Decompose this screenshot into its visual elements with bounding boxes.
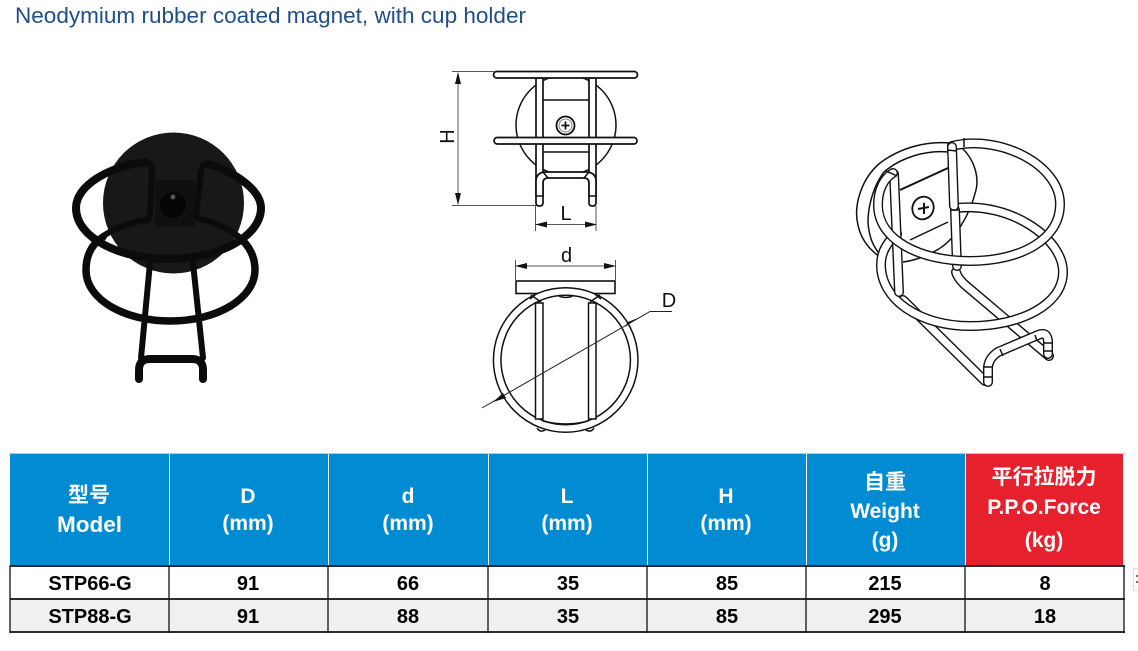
table header: Weight — [850, 500, 920, 523]
table header: (mm) — [222, 512, 274, 535]
table header: D — [240, 485, 256, 508]
specification table — [9, 454, 1125, 633]
row: STP66-G: STP66-G — [48, 573, 132, 595]
lower ring — [881, 207, 1063, 326]
table header: L — [561, 485, 574, 508]
row: STP88-G: 85 — [716, 606, 738, 628]
table header: P.P.O.Force — [987, 496, 1101, 519]
dimension L: L — [560, 203, 572, 225]
table header: (mm) — [382, 512, 434, 535]
dimension H: H — [437, 129, 459, 144]
magnet disc outline — [857, 143, 977, 262]
table header: (mm) — [541, 512, 593, 535]
table header: H — [718, 485, 734, 508]
dimension d: d — [561, 245, 572, 267]
uprights — [894, 174, 957, 292]
dimension d — [516, 245, 616, 280]
row: STP88-G: 88 — [397, 606, 419, 628]
table header — [10, 454, 1123, 565]
dimension L — [536, 203, 596, 231]
row: STP88-G: 295 — [868, 606, 902, 628]
row: STP88-G — [10, 599, 1124, 632]
table header: (kg) — [1025, 529, 1063, 552]
dimension H — [437, 72, 536, 206]
row: STP66-G: 91 — [237, 573, 259, 595]
table header: (mm) — [700, 512, 752, 535]
table header: (g) — [872, 529, 898, 552]
product photo: magnet with cup holder — [76, 132, 261, 379]
row: STP88-G: 18 — [1034, 606, 1056, 628]
row: STP66-G: 35 — [557, 573, 579, 595]
row: STP88-G: 91 — [237, 606, 259, 628]
icon: screw — [909, 193, 937, 223]
page edge artifact — [1134, 568, 1138, 590]
table header: 型号 — [68, 484, 110, 507]
front view drawing with H and L dimensions — [437, 72, 638, 231]
row: STP88-G: 35 — [557, 606, 579, 628]
top view drawing with d and D dimensions — [482, 245, 676, 431]
legs and hook — [903, 272, 1053, 382]
dimension D — [482, 290, 676, 408]
table header: 自重 — [864, 471, 906, 494]
table header: Model — [57, 512, 122, 537]
row: STP66-G: 8 — [1039, 573, 1051, 595]
isometric line drawing of holder — [857, 138, 1063, 382]
mounting plate — [900, 168, 948, 190]
row: STP66-G: 66 — [397, 573, 419, 595]
row: STP66-G: 215 — [868, 573, 902, 595]
table header: 平行拉脱力 — [992, 465, 1096, 489]
table header: d — [402, 485, 414, 508]
dimension D: D — [662, 290, 676, 312]
icon: screw — [556, 116, 574, 134]
row: STP88-G: STP88-G — [48, 606, 132, 628]
title: Neodymium rubber coated magnet, with cup holder — [15, 3, 526, 28]
upper ring — [878, 138, 1060, 261]
row: STP66-G: 85 — [716, 573, 738, 595]
row: STP66-G — [10, 566, 1124, 599]
